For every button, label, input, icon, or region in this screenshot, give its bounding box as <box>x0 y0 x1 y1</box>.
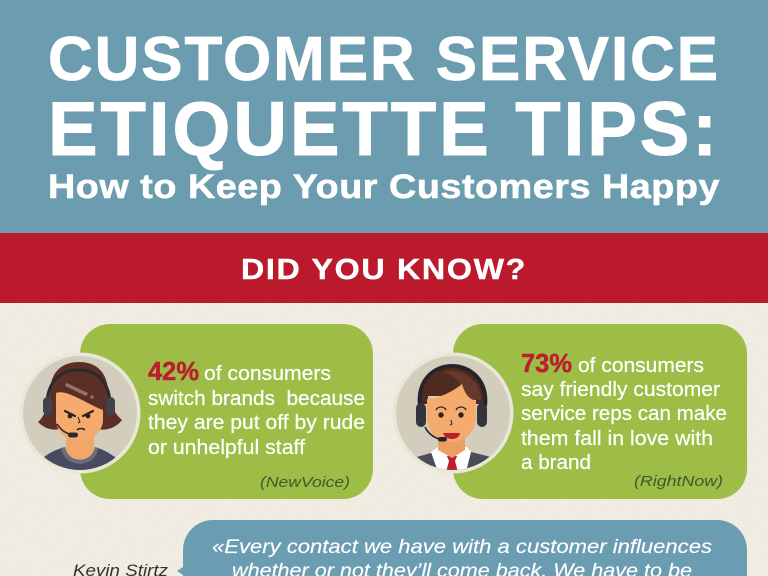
hair highlight <box>67 385 86 394</box>
figure 73%: 73% <box>521 348 572 378</box>
title line 1: CUSTOMER SERVICE <box>48 25 720 94</box>
statistic text <box>521 348 727 474</box>
angry brows and eyes <box>65 411 93 416</box>
title <box>48 25 720 206</box>
statistic copy: of consumers <box>204 363 331 385</box>
header band <box>0 0 768 233</box>
quote text <box>212 537 713 576</box>
microphone <box>57 424 69 434</box>
statistic copy <box>148 363 365 459</box>
statistic copy: a brand <box>521 452 591 474</box>
title line 2: ETIQUETTE TIPS: <box>48 87 720 172</box>
headset band <box>47 370 110 403</box>
brows and eyes <box>436 407 466 410</box>
panel: quote <box>73 520 747 576</box>
hair dome <box>420 367 484 404</box>
quote text: «Every contact we have with a customer influences <box>212 537 713 558</box>
neck <box>438 438 465 458</box>
figure 42%: 42% <box>148 356 199 386</box>
source: (NewVoice) <box>260 474 350 491</box>
statistic copy: them fall in love with <box>521 428 713 450</box>
statistic copy: say friendly customer <box>521 379 720 401</box>
tie <box>446 456 458 470</box>
hair swoop <box>442 371 481 400</box>
smile <box>443 433 460 439</box>
quote bubble <box>177 520 747 576</box>
statistic copy: or unhelpful staff <box>148 437 305 459</box>
shirt <box>44 447 116 470</box>
shirt collar <box>431 447 471 472</box>
neck and chest <box>66 436 94 460</box>
statistic text <box>148 356 365 459</box>
face <box>56 392 103 441</box>
red banner <box>0 233 768 303</box>
source: (RightNow) <box>634 473 723 490</box>
statistic copy: of consumers <box>578 355 704 377</box>
panel: 42% statistic <box>20 324 373 499</box>
statistic copy: switch brands because <box>148 388 365 410</box>
icon: angry agent avatar <box>20 352 140 476</box>
banner heading: DID YOU KNOW? <box>241 254 527 286</box>
paper background <box>0 303 768 576</box>
statistic copy: service reps can make <box>521 403 727 425</box>
green bubble right <box>453 324 747 499</box>
microphone <box>425 427 439 439</box>
icon: happy agent avatar <box>392 352 514 476</box>
hair <box>38 362 122 430</box>
headset band <box>420 366 485 406</box>
green bubble left <box>80 324 373 499</box>
statistic copy: they are put off by rude <box>148 412 365 434</box>
face <box>427 384 476 442</box>
subtitle: How to Keep Your Customers Happy <box>48 168 720 206</box>
suit <box>416 452 490 470</box>
panel: 73% statistic <box>392 324 747 499</box>
statistic copy <box>521 355 727 474</box>
